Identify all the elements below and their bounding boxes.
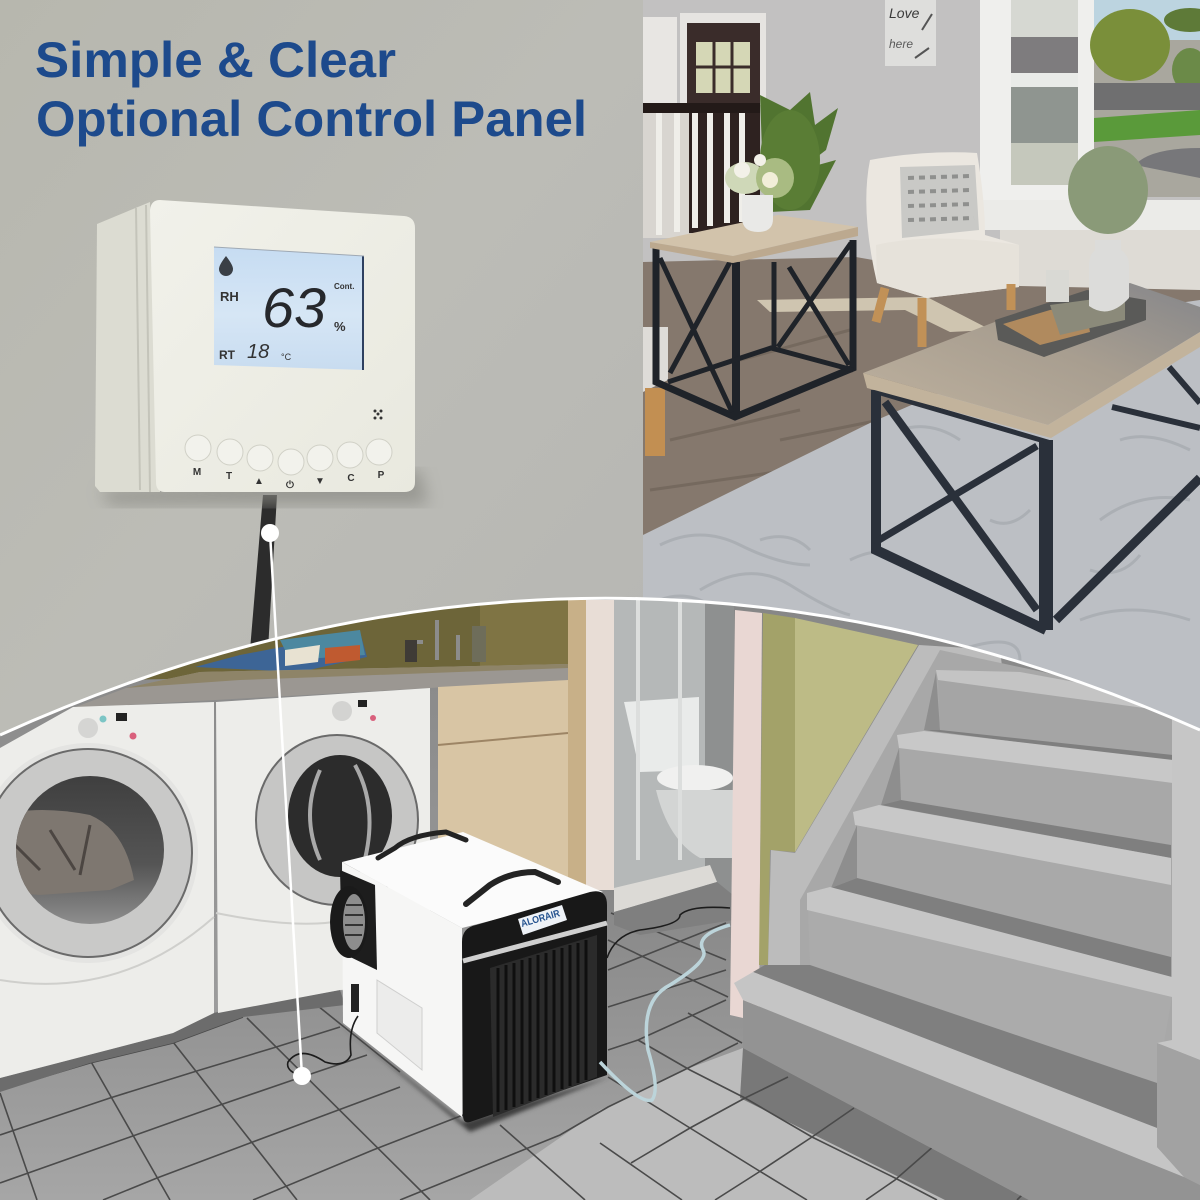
LCD screen: RH <box>220 289 239 304</box>
armchair <box>866 152 1019 347</box>
title: Simple & Clear <box>35 32 396 88</box>
logo badge: ALORAIR <box>520 908 562 930</box>
buttons <box>185 435 392 475</box>
wall art: here <box>889 37 913 51</box>
round duct with grille <box>330 886 368 958</box>
dehumidifier front <box>462 891 607 1122</box>
panel shadow <box>100 470 428 505</box>
door frame <box>568 600 614 890</box>
button labels: ▼ <box>315 476 325 487</box>
button labels: M <box>193 467 201 478</box>
baseboard shadow under washers <box>0 990 345 1092</box>
chair edge left <box>643 327 668 456</box>
back wall above counter <box>144 606 480 680</box>
folded towels <box>195 630 367 672</box>
silver strip <box>463 923 607 961</box>
lower bright wall by window <box>1000 230 1200 290</box>
icon: water drop <box>219 256 233 276</box>
button labels: T <box>226 471 232 482</box>
sink faucets and bottle <box>405 620 486 662</box>
hallway door <box>643 13 766 107</box>
stair railing <box>643 103 760 238</box>
connector <box>351 984 359 1012</box>
cable from control panel <box>250 495 277 650</box>
LCD screen <box>214 247 364 370</box>
right pillar <box>1157 700 1200 1060</box>
step wedges <box>924 672 940 730</box>
handles <box>378 832 558 904</box>
duct plate <box>340 870 377 970</box>
black power cord <box>607 907 730 958</box>
laundry in drum <box>0 810 134 895</box>
vase with flowers <box>725 154 794 232</box>
staircase <box>734 645 1200 1200</box>
pale floor mat <box>757 297 991 332</box>
front louvres <box>490 935 597 1117</box>
living room floor <box>643 257 1200 535</box>
drain hose <box>600 925 730 1101</box>
coffee table <box>863 283 1200 630</box>
step 1 <box>938 680 1173 755</box>
rug <box>643 300 1200 535</box>
callout connector line <box>261 524 311 1085</box>
shadowed tiles beside stairs <box>740 1048 1029 1200</box>
countertop <box>73 664 568 708</box>
dehumidifier top <box>342 832 603 928</box>
panel side housing <box>95 202 160 492</box>
back wall of stairs <box>800 650 1172 1042</box>
control panel device <box>95 200 428 505</box>
rating plate <box>377 980 422 1070</box>
pink column <box>730 610 762 1018</box>
tall palm plant <box>760 92 838 212</box>
LCD screen: °C <box>281 352 292 362</box>
dehumidifier <box>330 832 612 1132</box>
step 4 <box>808 910 1172 1083</box>
wall art: Love <box>889 5 920 21</box>
step 5 <box>743 1000 1200 1200</box>
button labels: ▲ <box>254 476 264 487</box>
cabinet <box>438 680 568 880</box>
LCD screen: Cont. <box>334 282 354 291</box>
lighter tiles <box>470 1048 945 1200</box>
panel: basement utility photo <box>0 590 1200 1200</box>
button labels: P <box>378 470 385 481</box>
stringer wall <box>768 645 1010 970</box>
dehumidifier floor shadow <box>335 1020 612 1132</box>
control cable <box>288 1016 358 1077</box>
LCD screen: 63 <box>262 276 326 339</box>
panel front face <box>150 200 415 492</box>
white arc divider <box>0 598 1200 735</box>
title: Optional Control Panel <box>36 91 587 147</box>
right washer <box>216 688 430 1013</box>
dehumidifier side <box>342 862 462 1117</box>
tile floor <box>0 890 1028 1200</box>
shower with toilet <box>614 600 734 935</box>
title <box>35 32 587 147</box>
control dial <box>78 718 98 738</box>
button labels: C <box>347 473 355 484</box>
LCD screen: % <box>334 319 346 334</box>
side table <box>650 215 858 417</box>
olive wall <box>759 613 918 965</box>
step 3 <box>857 825 1171 957</box>
step 2 <box>901 748 1173 845</box>
panel: grey wall <box>0 0 643 760</box>
LCD screen: 18 <box>247 341 269 363</box>
wall art <box>885 0 936 66</box>
panel: living room photo <box>643 0 1200 760</box>
LCD screen: RT <box>219 348 236 362</box>
tray with vase and candle <box>995 146 1148 357</box>
left washer <box>0 702 214 1078</box>
window <box>980 0 1200 230</box>
icon: fan indicator <box>374 410 382 420</box>
button labels: ⏻ <box>286 479 294 491</box>
button labels <box>193 467 385 491</box>
